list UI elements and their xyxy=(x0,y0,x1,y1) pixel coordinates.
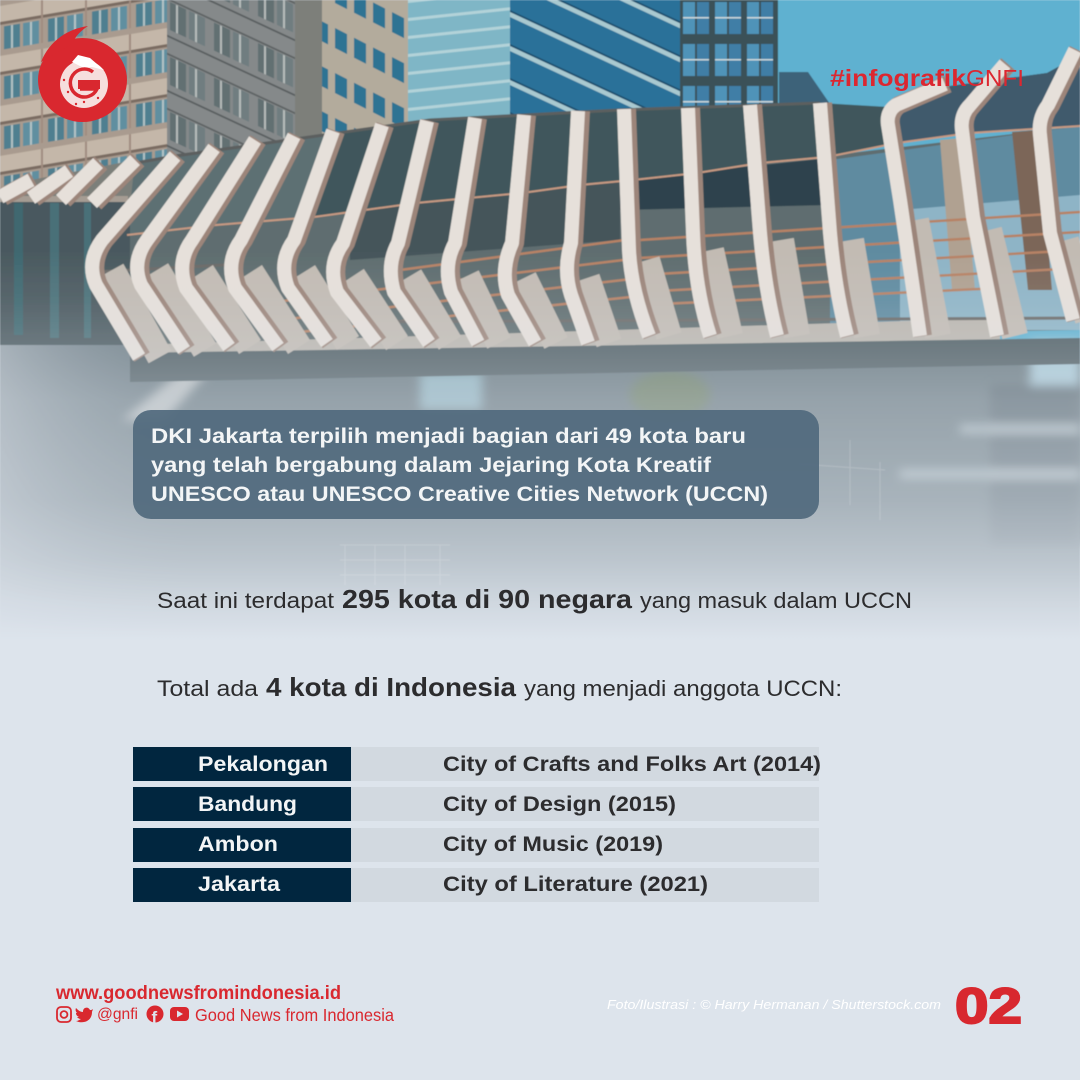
emblem xyxy=(60,55,108,108)
grey lower rod xyxy=(95,264,1080,322)
handle text: @gnfi xyxy=(97,1006,138,1023)
statistic line: Indonesian cities: Total ada xyxy=(157,676,259,701)
front building facade xyxy=(0,0,168,200)
bridge deck xyxy=(130,318,1000,358)
statistic line: Indonesian cities: 4 kota di Indonesia xyxy=(266,672,517,702)
row: Ambon: Ambon xyxy=(198,833,278,856)
sky xyxy=(0,0,1080,400)
faded street details xyxy=(340,440,885,585)
low roof block xyxy=(779,72,830,118)
row: Bandung xyxy=(133,787,819,821)
statistic line: cities and countries xyxy=(157,584,912,614)
hashtag: #infografik xyxy=(830,65,966,91)
row: Jakarta xyxy=(133,868,819,902)
blue glass tower xyxy=(510,0,680,130)
panel: intro callout xyxy=(133,410,819,519)
row: Pekalongan xyxy=(133,747,821,781)
right interior light view xyxy=(830,126,1080,330)
intro text: yang telah bergabung dalam Jejaring Kota Kreatif xyxy=(151,454,712,477)
glass lower rail xyxy=(127,126,1080,235)
orange railings xyxy=(250,212,1080,332)
lower rib struts xyxy=(112,220,1080,357)
table: UCCN member cities xyxy=(133,747,821,902)
row: Bandung: City of Design (2015) xyxy=(443,793,676,816)
icon: facebook: f xyxy=(152,1008,158,1027)
blurred street details xyxy=(122,340,1080,545)
statistic line: Indonesian cities: yang menjadi anggota UCCN: xyxy=(524,676,842,701)
row: Jakarta: City of Literature (2021) xyxy=(443,873,708,896)
statistic line: cities and countries: 295 kota di 90 negara xyxy=(342,584,633,614)
footer: website: www.goodnewsfromindonesia.id xyxy=(55,983,341,1004)
row: Bandung: Bandung xyxy=(198,793,297,816)
row: Ambon: City of Music (2019) xyxy=(443,833,663,856)
intro text: DKI Jakarta terpilih menjadi bagian dari 49 kota baru xyxy=(151,425,746,448)
icon: youtube xyxy=(170,1007,189,1021)
logo: GNFI red speech drop with G emblem xyxy=(38,26,127,122)
photo credit: Foto/Ilustrasi : © Harry Hermanan / Shutterstock.com xyxy=(607,997,941,1012)
beige columns xyxy=(940,138,975,290)
statistic line: cities and countries: Saat ini terdapat xyxy=(157,588,334,613)
statistic line: cities and countries: yang masuk dalam UCCN xyxy=(640,588,912,613)
lower street scene xyxy=(0,340,1080,640)
icon: facebook xyxy=(146,1006,164,1027)
lighter left edge of street xyxy=(0,340,200,640)
row: Pekalongan: Pekalongan xyxy=(198,753,328,776)
top rail xyxy=(135,103,820,163)
row: Pekalongan: City of Crafts and Folks Art (2014) xyxy=(443,753,821,776)
hashtag: GNFI xyxy=(966,65,1024,91)
bridge glass roof band xyxy=(127,55,1080,235)
row: Ambon xyxy=(133,828,819,862)
statistic line: Indonesian cities xyxy=(157,672,842,702)
rib shadow side xyxy=(3,50,1078,357)
row: Jakarta: Jakarta xyxy=(198,873,280,896)
recessed shadow column xyxy=(295,0,322,150)
fog overlay xyxy=(0,250,1080,1080)
rib cream front xyxy=(0,50,1075,357)
bridge beam xyxy=(130,338,1080,382)
pale glass tower xyxy=(408,0,510,130)
footer: social handles xyxy=(57,1005,394,1027)
intro text: UNESCO atau UNESCO Creative Cities Network (UCCN) xyxy=(151,483,768,506)
far-left bridge segment xyxy=(0,160,135,240)
page name: Good News from Indonesia xyxy=(195,1005,394,1025)
round tower xyxy=(680,0,778,125)
bridge interior xyxy=(90,126,1080,345)
tan building xyxy=(295,0,408,170)
icon: instagram xyxy=(57,1007,71,1022)
page number: 02 xyxy=(955,978,1022,1034)
icon: twitter xyxy=(76,1008,93,1022)
side building facade xyxy=(167,0,302,190)
intro text xyxy=(151,425,768,506)
